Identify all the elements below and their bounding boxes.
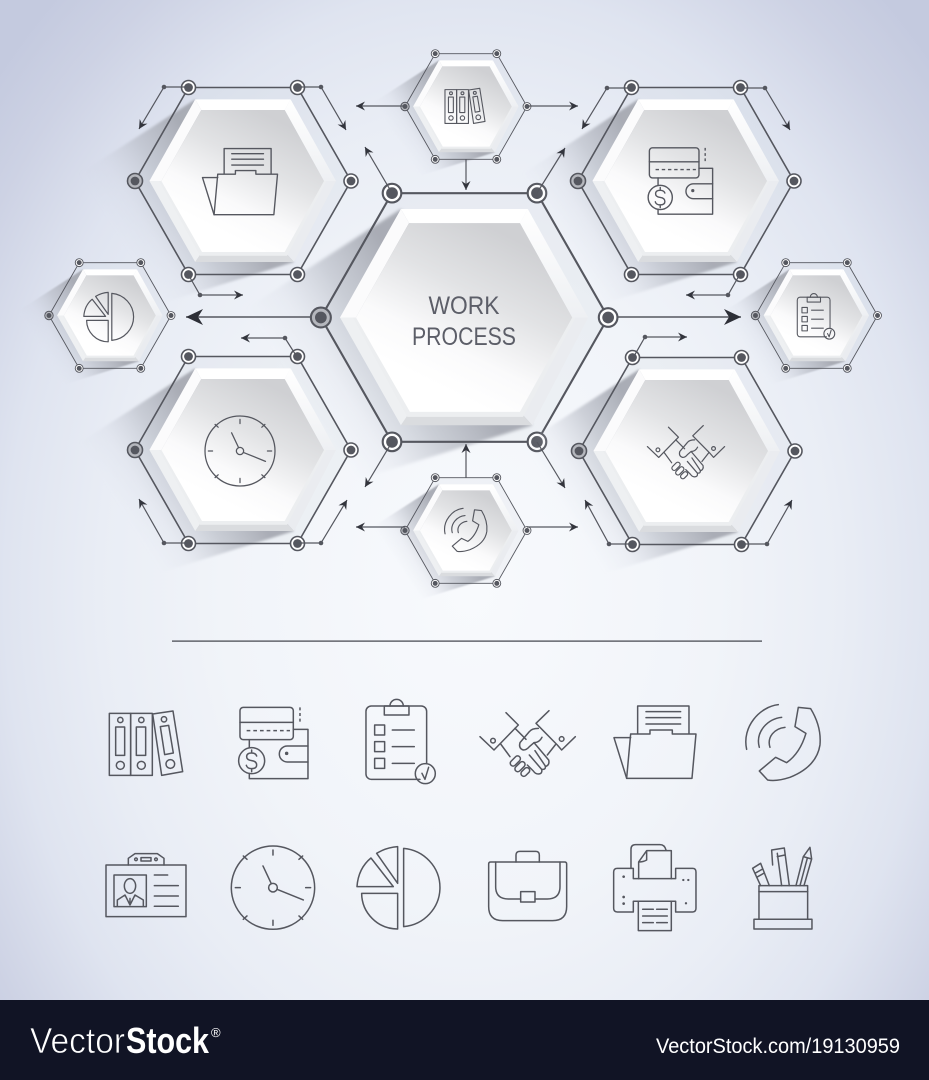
icon: binders [445,88,485,123]
central hexagon: work process [238,184,617,484]
title: work process: WORK [428,292,500,320]
icon: pie chart large [357,847,440,929]
footer url: VectorStock.com/19130959 [656,1035,900,1058]
title: work process: PROCESS [412,323,516,351]
icon: pie chart [84,292,134,342]
hexagon: checklist [720,259,881,386]
icon: phone large [746,705,820,780]
icon: printer [614,845,696,931]
icon: binders large [109,711,183,775]
icon: phone [445,508,487,552]
icon: handshake [647,426,725,480]
icon set: bottom row [106,845,812,931]
hexagon: folder [73,80,358,306]
footer logo: Stock: Stock [126,1020,210,1061]
footer registered mark: ® [211,1025,221,1040]
title: work process [412,292,516,351]
icon: handshake large [480,711,575,778]
hexagon: clock [73,350,358,575]
icon: wallet large [239,707,308,779]
icon: folder [202,149,278,215]
icon set: top row [109,699,820,784]
icon: clock large [231,846,315,929]
icon: id badge [106,854,186,917]
hexagon: phone [370,474,531,601]
icon: checklist large [366,699,435,784]
footer logo: Vector: Vector [30,1020,125,1061]
icon: wallet [648,148,713,214]
icon: checklist [797,294,835,339]
divider line [172,640,762,642]
hexagon: binders [370,50,531,177]
icon: pens in cup [753,847,812,929]
icon: clock [205,416,275,486]
icon: folder large [614,706,696,778]
hexagon: wallet [516,80,801,306]
hexagon: pie chart [14,259,175,386]
footer bar [0,1000,929,1080]
hexagon: handshake [517,350,802,576]
connector arrows [139,85,792,546]
icon: briefcase [489,851,567,921]
